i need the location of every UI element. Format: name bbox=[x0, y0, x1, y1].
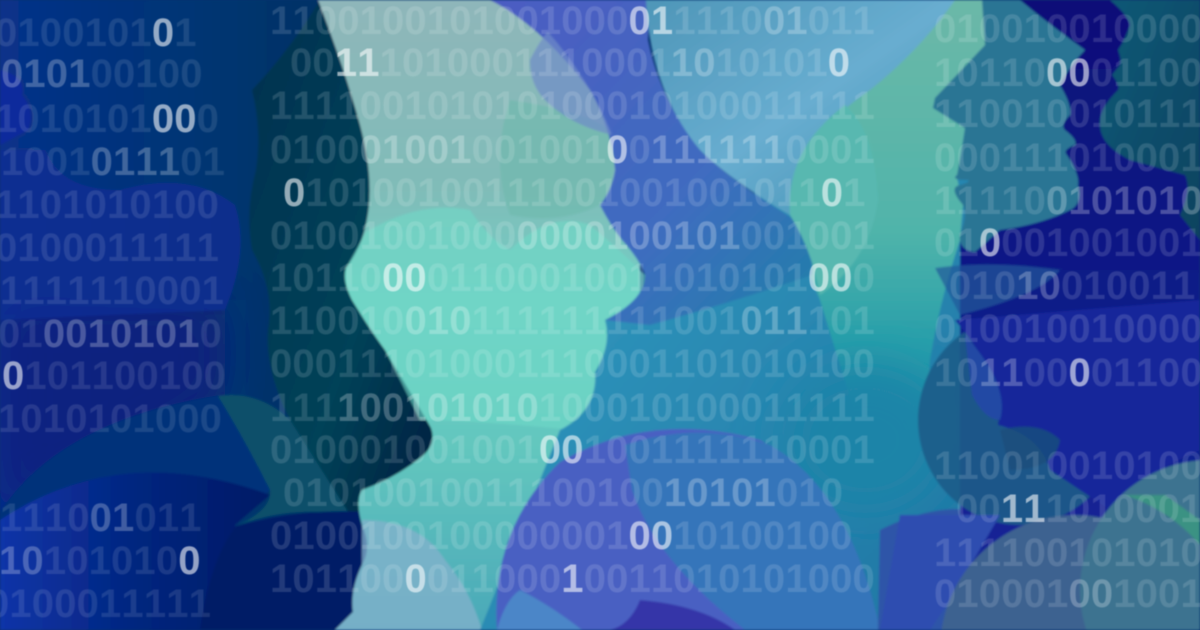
shaded lower neck bbox=[935, 264, 1060, 315]
binary text: centre column: 0101001001110010010101010 bbox=[283, 471, 843, 515]
binary text: right column: 010001001001 bbox=[934, 572, 1200, 616]
binary text: right column: 01010010011 bbox=[949, 264, 1195, 308]
blue band head bbox=[490, 0, 812, 325]
navy base profile bbox=[200, 511, 380, 630]
lighter right lobe of circle bbox=[625, 432, 880, 630]
binary text: right column: 010010010000 bbox=[934, 307, 1200, 351]
binary text: right column: 010001001001 bbox=[934, 221, 1200, 265]
green vertical strip bbox=[790, 0, 986, 430]
blurred teal-blue blend below strip bbox=[780, 365, 950, 515]
soft green shade in face bbox=[500, 100, 614, 218]
binary text: centre column: 01001001000000010010100100 bbox=[270, 514, 853, 558]
binary text: centre column: 010010010000000100101001001 bbox=[270, 214, 875, 258]
light central face bbox=[318, 0, 640, 630]
binary text: left column: 0101100100 bbox=[2, 354, 226, 398]
binary text: right column: 010010010000 bbox=[934, 7, 1200, 51]
lower light-blue wedge bbox=[497, 590, 582, 630]
left royal blue patches bbox=[0, 70, 241, 320]
binary text: right column: 101100001100 bbox=[934, 51, 1200, 95]
binary text: centre column: 000111010001110001101010100 bbox=[270, 342, 875, 386]
binary text: left column: 101010100 bbox=[0, 539, 201, 583]
left navy wash bbox=[0, 300, 225, 520]
teal head sliver bbox=[218, 395, 350, 526]
grey-blue lower head bbox=[335, 520, 482, 630]
binary text: right column: 111100101010 bbox=[934, 179, 1200, 223]
blue-violet right base bbox=[878, 509, 1000, 630]
binary text: centre column bbox=[270, 0, 875, 601]
binary text: left column: 111001011 bbox=[0, 496, 202, 540]
lower left bright blue wash bbox=[0, 473, 270, 630]
binary text: left column bbox=[0, 11, 226, 626]
lower big blue circle bbox=[496, 429, 880, 630]
binary text: centre column: 101100001100010011010101000 bbox=[270, 557, 875, 601]
binary text: centre column: 110010010111111111001011101 bbox=[270, 299, 875, 343]
binary text: right column: 101100001100 bbox=[934, 351, 1200, 395]
binary text: centre column: 0011101000111000110101010 bbox=[290, 41, 850, 85]
binary text: left column: 1010101000 bbox=[0, 97, 219, 141]
teal profile facing left bbox=[933, 0, 1085, 252]
purple translucent overlap bbox=[530, 32, 612, 135]
binary text: centre column: 010001001001001001111110001 bbox=[270, 128, 875, 172]
binary text: right column: 000111010001 bbox=[934, 136, 1200, 180]
navy overlap on oval bbox=[955, 300, 1200, 510]
binary text: centre column: 010001001001001001111110001 bbox=[270, 428, 875, 472]
violet lower left of right panel bbox=[880, 515, 1000, 630]
binary text: right column: 110010010100 bbox=[934, 444, 1200, 488]
lower left blue mound bbox=[0, 395, 280, 630]
green sliver bbox=[1125, 495, 1200, 545]
mid-right teal field bbox=[480, 0, 1000, 630]
binary text: centre column: 111100101010100010100011111 bbox=[270, 84, 875, 128]
teal face highlight bbox=[345, 208, 645, 430]
light blue blob top bbox=[646, 0, 955, 215]
grey-blue big circle bbox=[942, 515, 1200, 630]
deep purple strip bbox=[610, 600, 735, 630]
upper-right far head bbox=[1090, 0, 1200, 250]
binary text: centre column: 111100101010100010100011111 bbox=[270, 386, 875, 430]
central dark profile bbox=[249, 0, 440, 520]
binary text: centre column: 101100001100010011010101000 bbox=[270, 256, 875, 300]
binary text: left column: 1001011101 bbox=[1, 140, 225, 184]
dark oval head bbox=[918, 315, 1122, 525]
left dark blue field bbox=[0, 0, 425, 630]
binary text: left column: 0100101010 bbox=[0, 312, 222, 356]
binary text: left column: 1010101000 bbox=[0, 397, 222, 441]
binary text: left column: 1101010100 bbox=[0, 183, 219, 227]
binary text: left column: 1111110001 bbox=[0, 269, 224, 313]
teal-green patch bbox=[790, 105, 878, 295]
binary text: right column bbox=[934, 7, 1200, 616]
navy head, right bbox=[960, 0, 1200, 630]
dark mottled patch bbox=[1000, 427, 1060, 470]
binary text: right column: 111100101010 bbox=[934, 531, 1200, 575]
binary text: left column: 010100100 bbox=[1, 52, 203, 96]
binary text: centre column: 110010010100100001111001011 bbox=[270, 0, 875, 43]
binary text: left column: 010010101 bbox=[0, 11, 197, 55]
blue lobe on oval bbox=[965, 335, 1002, 420]
binary text: left column: 0100011111 bbox=[0, 226, 219, 270]
binary text: centre column: 01010010011100100100101101 bbox=[283, 171, 866, 215]
grey-teal big circle bbox=[1080, 460, 1200, 630]
